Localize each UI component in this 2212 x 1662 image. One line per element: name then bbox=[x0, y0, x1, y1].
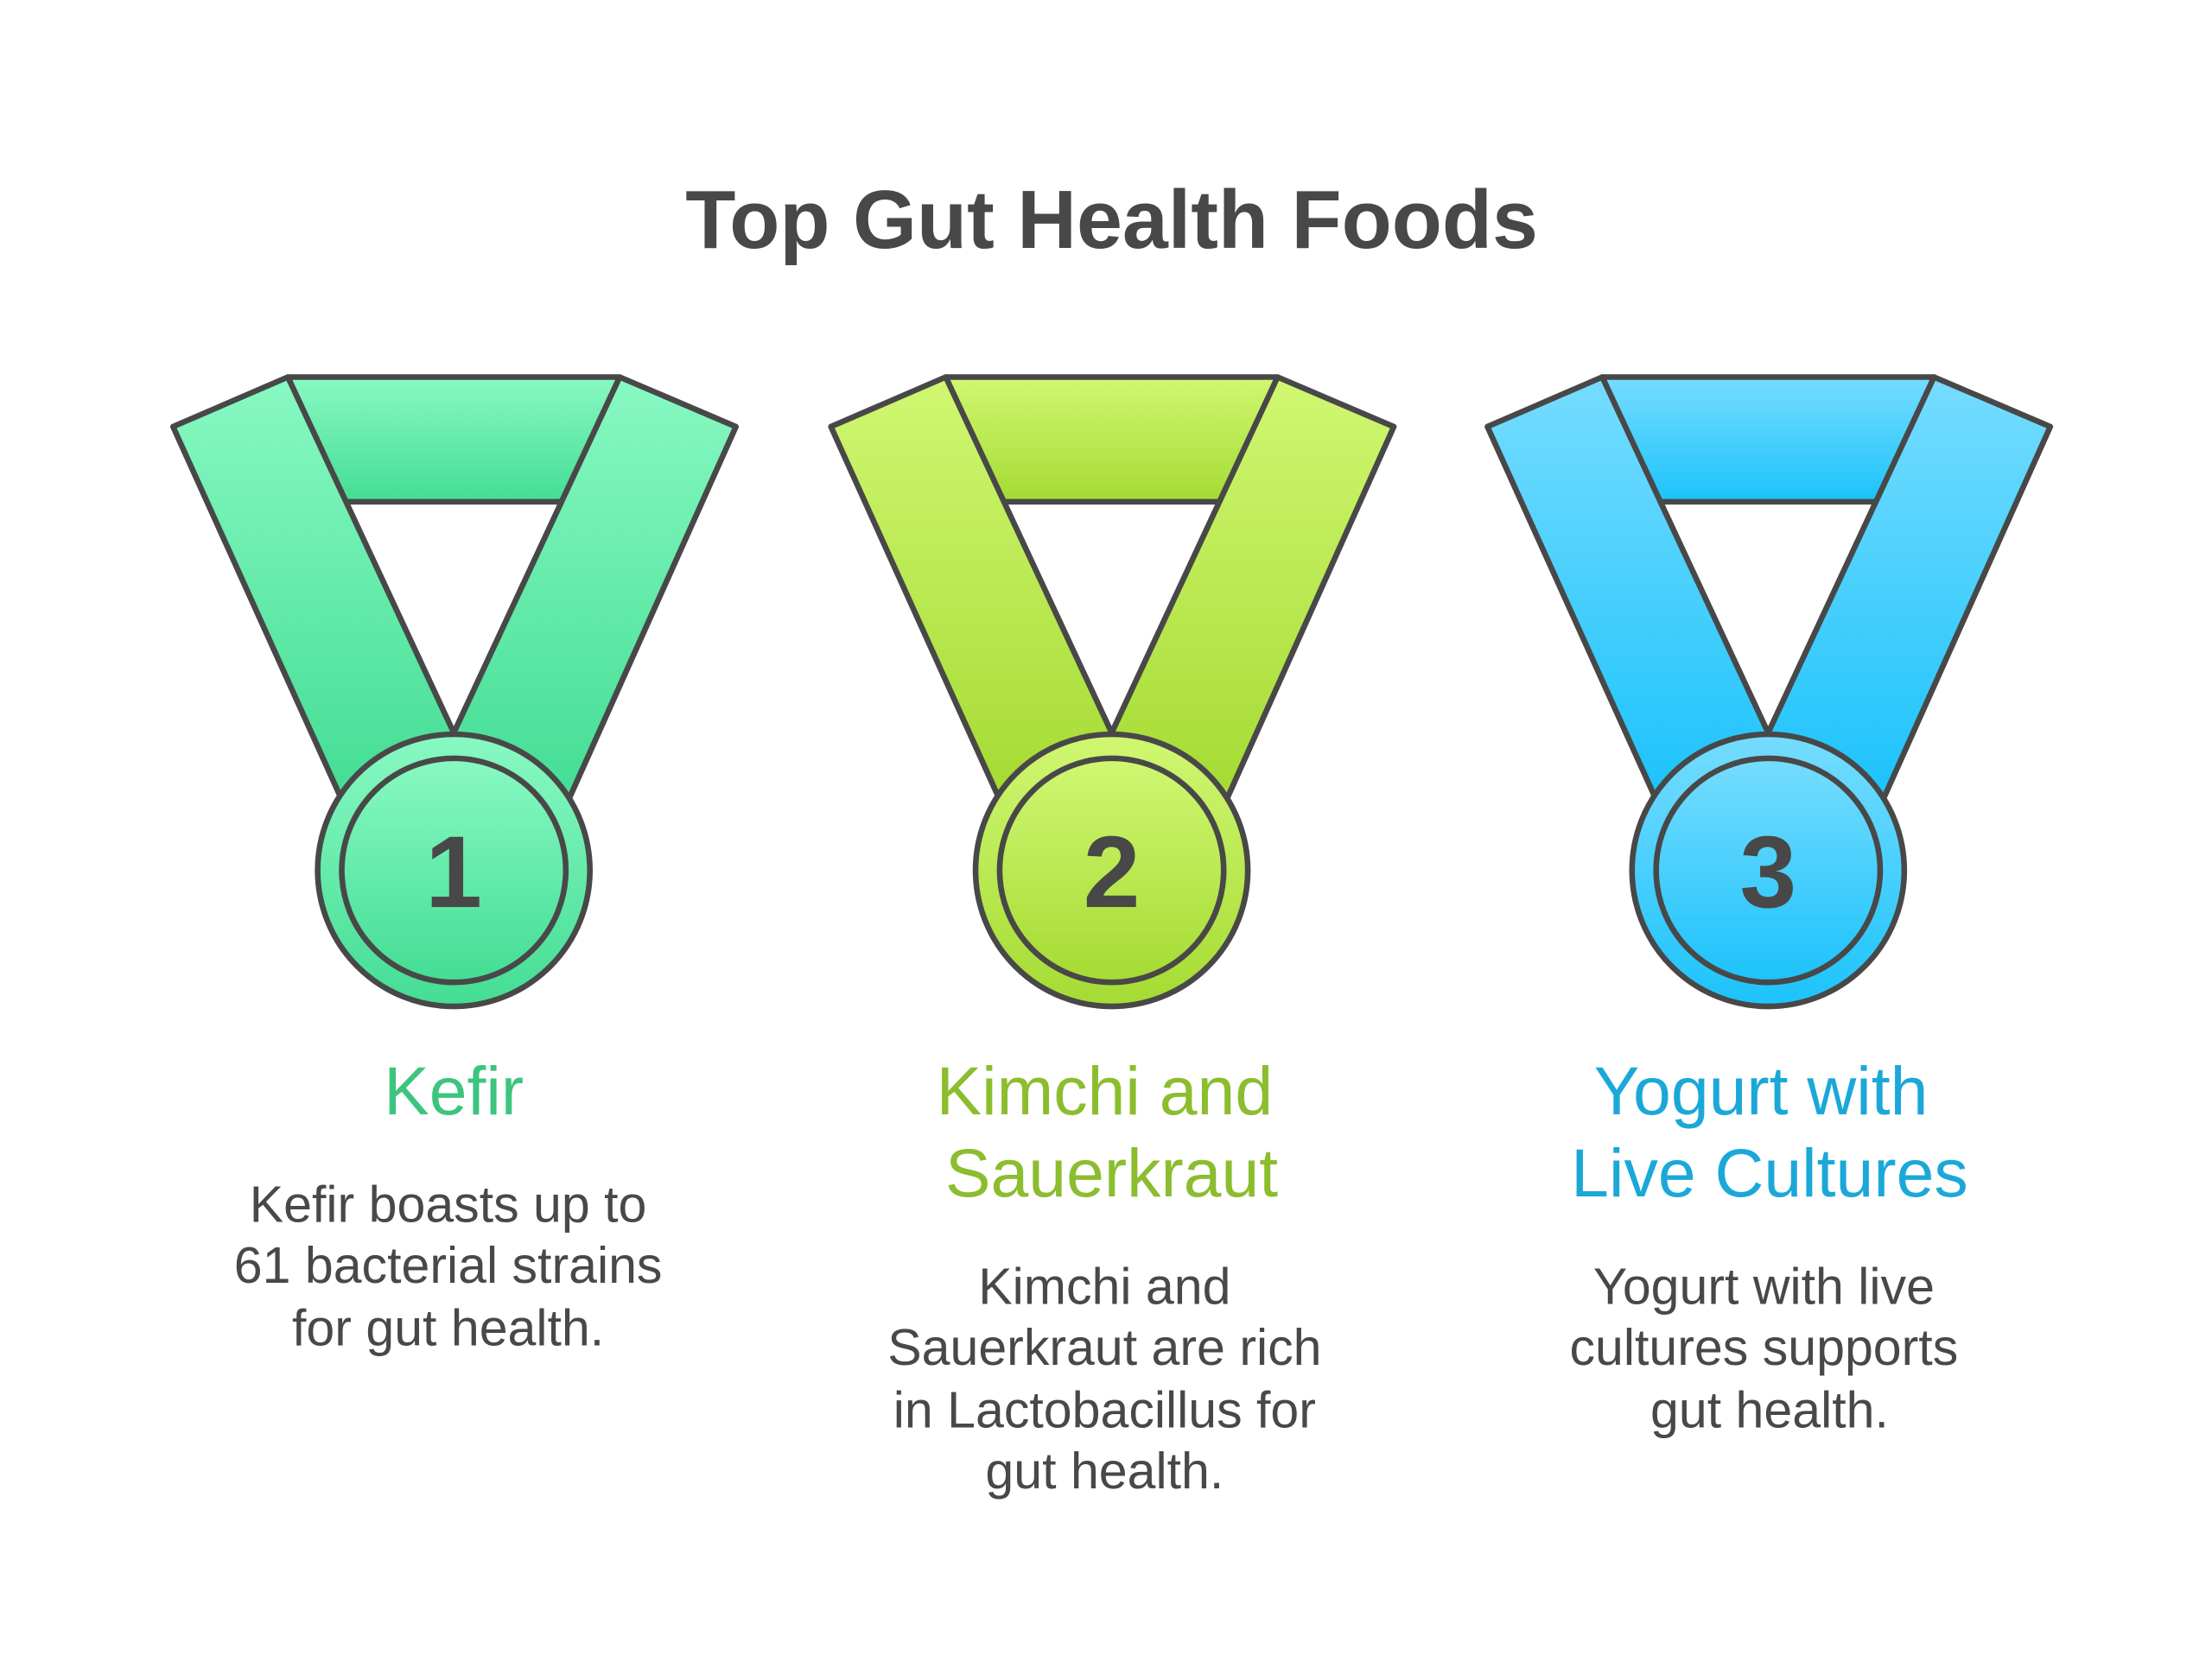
icon: medal 1 bbox=[173, 377, 736, 1006]
text: kimchi description: Kimchi and bbox=[978, 1259, 1230, 1316]
text: yogurt description: Yogurt with live bbox=[1593, 1259, 1935, 1316]
heading: Yogurt with Live Cultures: Yogurt with bbox=[1594, 1053, 1928, 1129]
heading: Yogurt with Live Cultures: Live Cultures bbox=[1571, 1135, 1968, 1211]
text: yogurt description: cultures supports bbox=[1570, 1319, 1958, 1376]
title: Top Gut Health Foods bbox=[685, 174, 1538, 266]
icon: medal 3 bbox=[1487, 377, 2050, 1006]
text: kimchi description: in Lactobacillus for bbox=[893, 1381, 1316, 1438]
heading: Kimchi and Sauerkraut: Kimchi and bbox=[937, 1053, 1273, 1129]
text: kefir description: for gut health. bbox=[292, 1299, 604, 1356]
text: kefir description: 61 bacterial strains bbox=[234, 1237, 662, 1294]
text: kimchi description: gut health. bbox=[985, 1443, 1224, 1500]
icon: medal 3: 3 bbox=[1739, 815, 1796, 929]
heading: Kefir: Kefir bbox=[384, 1053, 524, 1129]
panel: yogurt bbox=[1487, 377, 2050, 1438]
text: kefir description: Kefir boasts up to bbox=[250, 1176, 646, 1233]
icon: medal 2 bbox=[831, 377, 1394, 1006]
panel: kefir bbox=[173, 377, 736, 1356]
panel: kimchi bbox=[831, 377, 1394, 1500]
text: kimchi description: Sauerkraut are rich bbox=[887, 1319, 1321, 1376]
text: yogurt description: gut health. bbox=[1650, 1381, 1889, 1438]
icon: medal 1: 1 bbox=[425, 815, 482, 929]
icon: medal 2: 2 bbox=[1084, 815, 1140, 929]
heading: Kimchi and Sauerkraut: Sauerkraut bbox=[945, 1135, 1278, 1211]
